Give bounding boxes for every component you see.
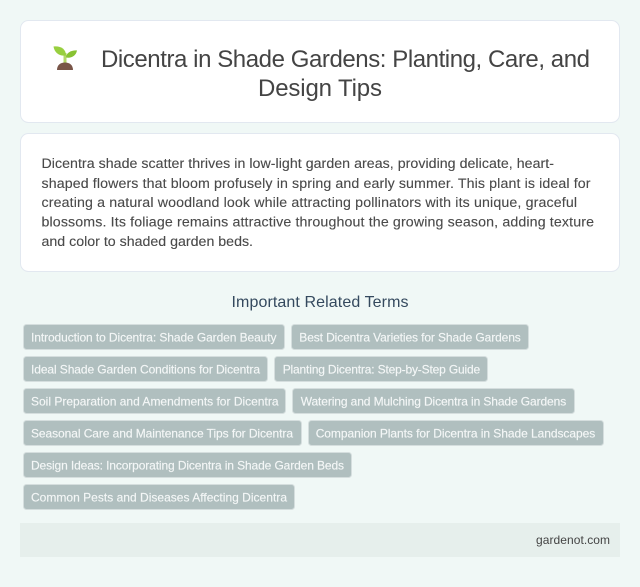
text block: description: blossoms. Its foliage remains attractive throughout the growing season, adding texture	[42, 214, 594, 230]
tag: introduction: Introduction to Dicentra: Shade Garden Beauty	[31, 330, 276, 344]
tag: seasonal care	[24, 420, 302, 446]
tag: conditions: Ideal Shade Garden Conditions for Dicentra	[31, 362, 260, 376]
panel: description	[20, 134, 620, 272]
title: Dicentra in Shade Gardens: Planting, Care, and	[101, 46, 590, 73]
icon: seedling	[54, 46, 77, 70]
text block: description: and color to shaded garden beds.	[42, 234, 253, 250]
tag: watering	[292, 388, 574, 414]
tag: introduction	[24, 324, 284, 350]
text block: description: shaped flowers that bloom profusely in spring and early summer. This plant is ideal for	[42, 176, 591, 192]
text block: description: creating a natural woodland look while attracting pollinators with its unique, graceful	[42, 195, 577, 211]
tag: design: Design Ideas: Incorporating Dicentra in Shade Garden Beds	[31, 458, 344, 472]
heading: related terms: Important Related Terms	[232, 294, 408, 311]
tag list	[24, 324, 604, 510]
tag: varieties: Best Dicentra Varieties for Shade Gardens	[299, 330, 521, 344]
tag: varieties	[292, 324, 528, 350]
title: Design Tips	[258, 75, 382, 102]
footer	[20, 523, 620, 557]
tag: pests: Common Pests and Diseases Affecting Dicentra	[31, 490, 287, 504]
tag: companions	[308, 420, 604, 446]
tag: soil: Soil Preparation and Amendments for Dicentra	[31, 394, 279, 408]
tag: conditions	[24, 356, 268, 382]
tag: planting: Planting Dicentra: Step-by-Step Guide	[283, 362, 481, 376]
tag: seasonal care: Seasonal Care and Maintenance Tips for Dicentra	[31, 426, 293, 440]
text block: description: Dicentra shade scatter thrives in low-light garden areas, providing delicate, heart-	[42, 156, 554, 172]
tag: pests	[24, 484, 294, 510]
panel: title card	[20, 20, 620, 122]
tag: watering: Watering and Mulching Dicentra in Shade Gardens	[301, 394, 566, 408]
title	[101, 46, 590, 102]
tag: soil	[24, 388, 286, 414]
tag: companions: Companion Plants for Dicentra in Shade Landscapes	[316, 426, 595, 440]
text block: description	[42, 156, 594, 250]
footer: gardenot.com	[536, 533, 610, 547]
tag: planting	[274, 356, 488, 382]
tag: design	[24, 452, 352, 478]
